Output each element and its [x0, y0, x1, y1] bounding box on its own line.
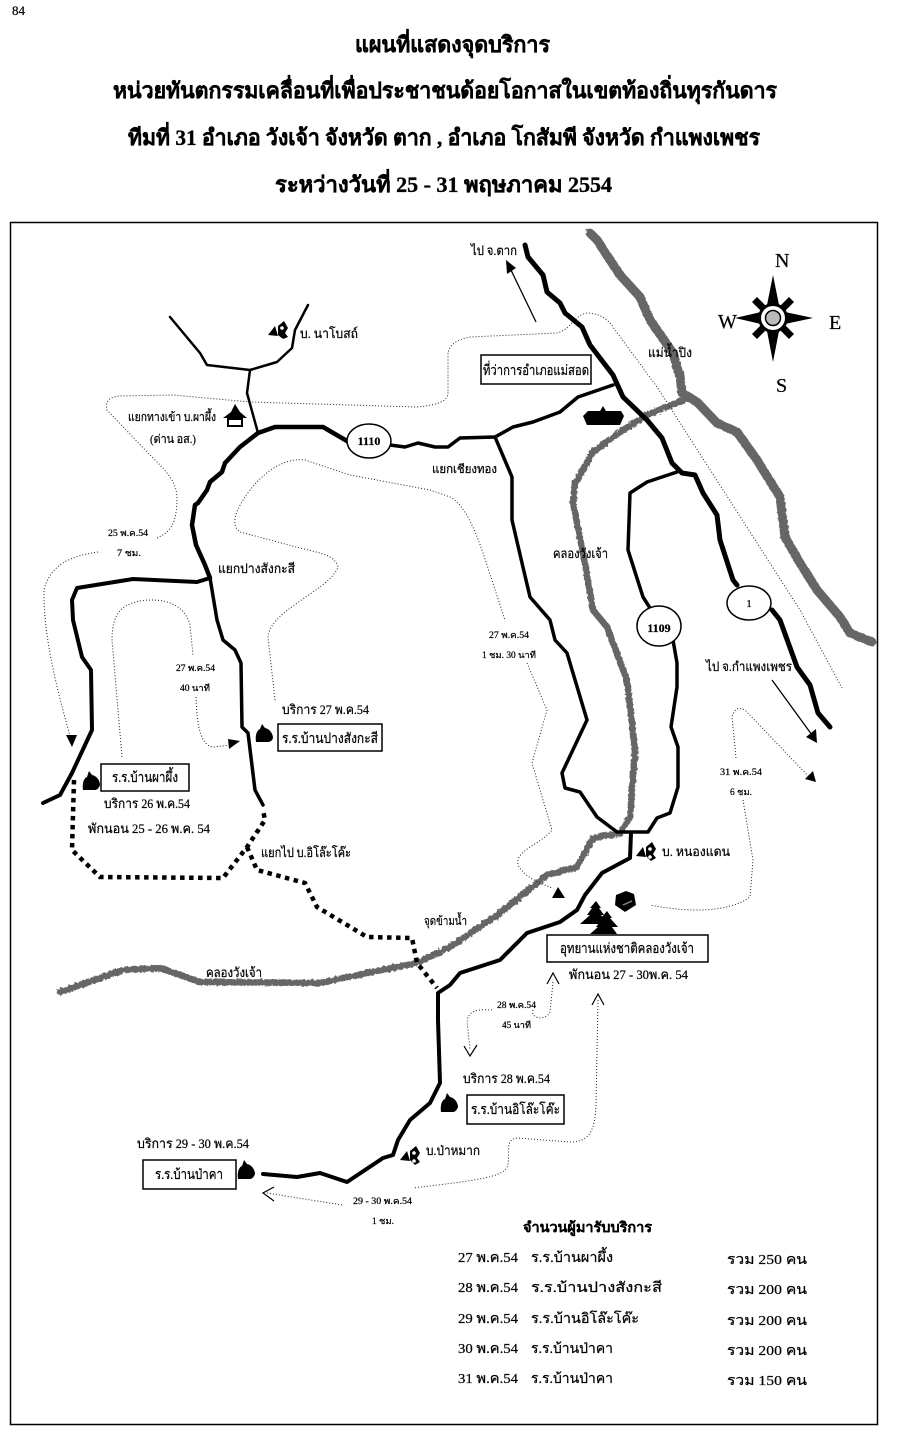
- map labels: 6 ชม.: [730, 787, 752, 797]
- row: 30 May: [458, 1341, 807, 1359]
- route: 25 May: [44, 552, 98, 743]
- oval: 1109: [637, 606, 681, 646]
- row: 29 May: [458, 1310, 807, 1329]
- icon: village Na Bot: [268, 321, 288, 339]
- row: 31 May: [458, 1371, 807, 1389]
- title: ระหว่างวันที่ 25 - 31 พฤษภาคม 2554: [275, 168, 612, 197]
- arrowhead: upper route: [552, 887, 565, 898]
- icon: office building: [583, 406, 624, 425]
- road: west to Pha Phueng: [43, 578, 210, 803]
- box: district office: [481, 355, 591, 384]
- compass letters: W: [718, 311, 737, 333]
- page number: 84: [12, 3, 26, 18]
- box: Pang Sangkasi school: [278, 724, 382, 751]
- arrowhead: 29-30 May left: [263, 1187, 274, 1201]
- road: highway 1 north: [525, 245, 737, 585]
- map labels: จุดข้ามน้ำ: [424, 912, 467, 929]
- oval: 1110: [347, 424, 391, 458]
- row: 28 May: [458, 1280, 807, 1298]
- route: 29-30 May upward: [413, 1000, 598, 1188]
- box: I Lo Ko school: [467, 1095, 564, 1124]
- map labels: (ด่าน อส.): [150, 432, 196, 446]
- map labels: 29 - 30 พ.ค.54: [353, 1196, 413, 1206]
- map labels: 45 นาที: [502, 1020, 531, 1030]
- map labels: พักนอน 25 - 26 พ.ค. 54: [88, 821, 210, 836]
- river: Wang Chao: [60, 398, 688, 992]
- road: dashed to crossing: [247, 847, 437, 988]
- map labels: 7 ชม.: [117, 548, 141, 558]
- road: branch to Ban Na Bot: [170, 305, 308, 370]
- box: Pa Kha school: [143, 1160, 236, 1189]
- icon: pine trees: [580, 901, 618, 934]
- route: 31 May lower: [650, 800, 753, 910]
- map labels: บริการ 26 พ.ค.54: [104, 796, 190, 811]
- compass letters: N: [775, 250, 789, 272]
- arrowhead: to Tak: [506, 260, 516, 274]
- route: 28 May: [467, 982, 553, 1050]
- map labels: บ.ป่าหมาก: [426, 1143, 480, 1158]
- table heading: จำนวนผู้มารับบริการ: [523, 1220, 652, 1236]
- road number ovals: [347, 424, 771, 646]
- map labels: คลองวังเจ้า: [206, 965, 262, 980]
- row: 28 May: 28 พ.ค.54: [458, 1281, 518, 1296]
- service recipients table: [458, 1220, 807, 1389]
- icon: school Pa Kha: [238, 1160, 255, 1179]
- row: 31 May: ร.ร.บ้านป่าคา: [531, 1371, 613, 1387]
- map labels: 40 นาที: [180, 683, 210, 693]
- title: หน่วยทันตกรรมเคลื่อนที่เพื่อประชาชนด้อยโอกาสในเขตท้องถิ่นทุรกันดาร: [113, 74, 777, 105]
- map labels: 1 ชม. 30 นาที: [482, 650, 536, 660]
- map labels: แยกปางสังกะสี: [218, 561, 295, 576]
- arrowhead: 29-30 May up: [592, 994, 604, 1005]
- title: แผนที่แสดงจุดบริการ: [355, 28, 550, 59]
- map labels: บริการ 27 พ.ค.54: [282, 702, 369, 717]
- row: 27 May: ร.ร.บ้านผาผึ้ง: [531, 1247, 613, 1266]
- row: 27 May: [458, 1247, 807, 1268]
- map labels: คลองวังเจ้า: [553, 546, 608, 561]
- arrowhead: 31 May: [805, 771, 816, 782]
- road: connector to Na Bot: [247, 370, 258, 433]
- compass letters: E: [829, 312, 841, 334]
- box: district office: ที่ว่าการอำเภอแม่สอด: [483, 361, 589, 379]
- map labels: 27 พ.ค.54: [489, 630, 530, 640]
- road: 1110 west section: [192, 427, 347, 578]
- map labels: แยกไป บ.อิโล๊ะโค๊ะ: [261, 845, 351, 860]
- road: 1109: [495, 437, 678, 832]
- arrows: [66, 260, 817, 1201]
- map labels: บริการ 29 - 30 พ.ค.54: [137, 1136, 249, 1151]
- row: 28 May: ร.ร.บ้านปางสังกะสี: [531, 1280, 663, 1296]
- title: ทีมที่ 31 อำเภอ วังเจ้า จังหวัด ตาก , อำเภอ โกสัมพี จังหวัด กำแพงเพชร: [128, 121, 760, 150]
- route: 31 May: [732, 708, 812, 780]
- road: highway 1 south: [772, 610, 830, 727]
- oval: 1110: 1110: [358, 434, 380, 448]
- map labels: แม่น้ำปิง: [648, 343, 692, 360]
- icon: ranger house: [223, 404, 247, 426]
- row: 28 May: รวม 200 คน: [727, 1283, 807, 1298]
- box: Pang Sangkasi school: ร.ร.บ้านปางสังกะสี: [282, 731, 378, 747]
- road: south main: [263, 833, 631, 1182]
- arrowhead: to Kamphaeng Phet: [806, 729, 817, 743]
- map labels: 28 พ.ค.54: [497, 1000, 537, 1010]
- map labels: [88, 243, 792, 1226]
- oval: 1: [727, 586, 771, 620]
- arrowhead: 28 May up: [547, 973, 559, 984]
- arrowhead: 27 May: [228, 739, 240, 749]
- icon: school Pha Phueng: [83, 771, 100, 790]
- arrowhead: 25 May: [66, 735, 77, 747]
- box: national park: อุทยานแห่งชาติคลองวังเจ้า: [560, 941, 694, 957]
- compass letters: S: [776, 375, 787, 397]
- rivers: [60, 233, 872, 992]
- map labels: แยกเชียงทอง: [432, 462, 497, 476]
- map labels: 31 พ.ค.54: [720, 767, 763, 777]
- roads: [43, 245, 830, 1182]
- map labels: ไป จ.ตาก: [470, 243, 517, 258]
- row: 29 May: รวม 200 คน: [727, 1314, 807, 1329]
- map labels: บ. นาโบสถ์: [300, 326, 358, 341]
- route: long border dotted line: [106, 313, 842, 688]
- route: upper school loop: [235, 460, 552, 888]
- icon: village Nong Daen: [636, 842, 656, 861]
- row: 27 May: 27 พ.ค.54: [458, 1251, 518, 1266]
- arrowhead: 28 May down: [464, 1045, 477, 1056]
- map labels: 1 ชม.: [372, 1216, 394, 1226]
- map labels: พักนอน 27 - 30พ.ค. 54: [569, 967, 688, 982]
- map labels: ไป จ.กำแพงเพชร: [705, 659, 792, 674]
- row: 30 May: ร.ร.บ้านป่าคา: [531, 1341, 613, 1357]
- road: south to Pang Sangkasi: [210, 578, 263, 805]
- row: 27 May: รวม 250 คน: [727, 1253, 807, 1268]
- map labels: 25 พ.ค.54: [108, 528, 149, 538]
- box: national park: [547, 935, 708, 962]
- row: 30 May: รวม 200 คน: [727, 1344, 807, 1359]
- icons: [83, 275, 813, 1179]
- row: 29 May: 29 พ.ค.54: [458, 1312, 518, 1327]
- title: [113, 28, 777, 197]
- oval: 1109: 1109: [647, 621, 671, 635]
- map labels: บริการ 28 พ.ค.54: [463, 1071, 550, 1086]
- arrow: to Kamphaeng Phet: [772, 680, 812, 735]
- dotted travel routes: [44, 313, 842, 1205]
- oval: 1: 1: [746, 598, 752, 610]
- icon: tent: [615, 891, 636, 912]
- route: 26-27 May: [112, 600, 193, 757]
- route: 29-30 May to Pa Kha: [267, 1193, 342, 1205]
- river: Ping: [590, 233, 872, 642]
- box: Pha Phueng school: [101, 764, 189, 791]
- icon: compass rose: [735, 275, 813, 362]
- arrow: to Tak: [510, 268, 536, 322]
- labelled boxes: [101, 355, 708, 1189]
- box: I Lo Ko school: ร.ร.บ้านอิโล๊ะโค๊ะ: [471, 1101, 560, 1118]
- icon: school I Lo Ko: [441, 1093, 458, 1112]
- row: 30 May: 30 พ.ค.54: [458, 1342, 518, 1357]
- road: dashed loop: [72, 780, 265, 878]
- map labels: บ. หนองแดน: [662, 844, 730, 859]
- row: 31 May: 31 พ.ค.54: [458, 1372, 518, 1387]
- route: 27 May 40 minutes: [196, 697, 232, 747]
- road: 1110 east section: [390, 385, 613, 447]
- row: 31 May: รวม 150 คน: [727, 1374, 807, 1389]
- box: Pa Kha school: ร.ร.บ้านป่าคา: [155, 1167, 223, 1183]
- map labels: แยกทางเข้า บ.ผาผึ้ง: [128, 408, 216, 424]
- map labels: 27 พ.ค.54: [176, 663, 216, 673]
- compass letters: [718, 250, 841, 397]
- icon: school Pang Sangkasi: [256, 724, 273, 742]
- row: 29 May: ร.ร.บ้านอิโล๊ะโค๊ะ: [531, 1310, 639, 1327]
- box: Pha Phueng school: ร.ร.บ้านผาผึ้ง: [112, 767, 178, 786]
- icon: village Pa Mak: [400, 1146, 420, 1165]
